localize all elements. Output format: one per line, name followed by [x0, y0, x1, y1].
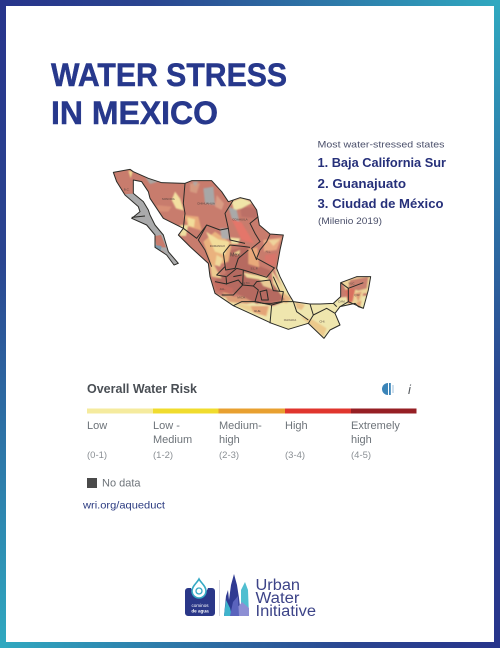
state labels: CHI. [319, 320, 325, 324]
state labels: N.L. [266, 249, 271, 253]
map of Mexico [112, 168, 372, 339]
state labels: COAHUILA [232, 218, 248, 222]
state labels [124, 188, 361, 324]
state labels: MICH. [237, 296, 246, 300]
logo: Urban Water Initiative wordmark: Water [256, 590, 300, 607]
scale labels: high [351, 434, 372, 446]
scale ranges: (2-3) [219, 450, 239, 461]
most water-stressed states list: (Milenio 2019) [318, 216, 382, 226]
most water-stressed states list [318, 140, 446, 226]
state labels: JAL. [220, 287, 226, 291]
state labels: Mex [230, 253, 240, 259]
scale labels: High [285, 420, 308, 432]
southern low risk area [216, 268, 366, 338]
no data key: No data [102, 478, 141, 490]
state labels: YUC. [348, 282, 355, 286]
legend: overall water risk [87, 381, 416, 490]
icon: info: i [408, 382, 412, 397]
most water-stressed states list: Most water-stressed states [318, 140, 445, 150]
scale labels: Extremely [351, 420, 400, 432]
source link: wri.org/aqueduct [82, 500, 165, 512]
scale labels [87, 420, 400, 446]
title [51, 57, 287, 131]
scale labels: high [219, 434, 240, 446]
logo: Urban Water Initiative wordmark [256, 577, 316, 620]
state boundaries [113, 169, 371, 338]
logo: Caminos de Agua: cominos [191, 603, 209, 608]
colour scale bar [87, 408, 416, 414]
title: WATER STRESS [51, 57, 287, 93]
state labels: CAM. [338, 300, 346, 304]
state labels: GUE. [254, 309, 261, 313]
scale ranges: (0-1) [87, 450, 107, 461]
logo divider [218, 580, 221, 616]
state labels: SONORA [162, 197, 175, 201]
most water-stressed states list: 1. Baja California Sur [318, 155, 446, 170]
scale ranges: (4-5) [351, 450, 371, 461]
title: IN MEXICO [51, 95, 218, 131]
state labels: Q.R. [354, 293, 361, 297]
orange mid risk patches [203, 232, 232, 267]
state labels: S.L.P. [250, 266, 258, 270]
legend title: Overall Water Risk [87, 381, 198, 396]
central dark risk area [214, 246, 285, 304]
state labels: CHIHUAHUA [197, 202, 215, 206]
logo: Caminos de Agua: de agua [191, 608, 209, 614]
state labels: DURANGO [210, 244, 226, 248]
scale labels: Low [87, 420, 107, 432]
state labels: OAXACA [284, 318, 296, 322]
state labels: B.C. [124, 188, 130, 192]
state labels: GTO. [243, 281, 250, 285]
icon: layer toggle [382, 383, 394, 395]
grey no-data patches [203, 187, 215, 205]
Baja California peninsula grey [124, 193, 180, 267]
most water-stressed states list: 2. Guanajuato [318, 176, 406, 191]
scale ranges: (3-4) [285, 450, 305, 461]
scale ranges: (1-2) [153, 450, 173, 461]
map base risk colour [114, 170, 367, 307]
logo: Urban Water Initiative wordmark: Urban [256, 577, 300, 594]
logo: Caminos de Agua [185, 579, 215, 616]
most water-stressed states list: 3. Ciudad de México [318, 196, 444, 211]
logo: Urban Water Initiative wordmark: Initiative [256, 603, 316, 620]
scale labels: Medium [153, 434, 192, 446]
scale labels: Medium- [219, 420, 262, 432]
logo: cathedral [224, 574, 249, 616]
yellow low risk patches [172, 192, 184, 211]
scale labels: Low - [153, 420, 180, 432]
scale ranges [87, 450, 371, 461]
